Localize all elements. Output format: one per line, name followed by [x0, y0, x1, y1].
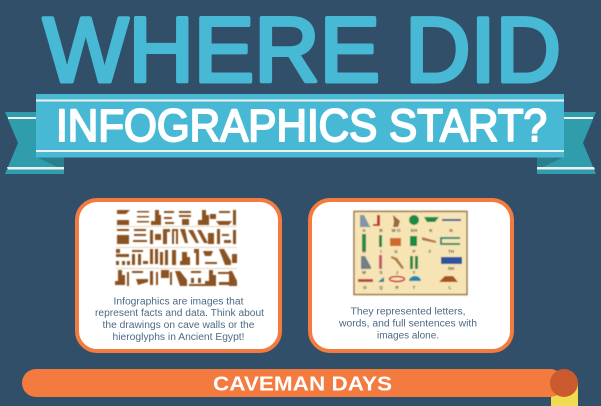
alphabet letters: L — [449, 285, 452, 290]
parchment alphabet illustration — [353, 210, 468, 296]
card text — [338, 306, 477, 342]
card text: represent facts and data. Think about — [95, 308, 264, 319]
card text: hieroglyphs in Ancient Egypt! — [112, 332, 244, 343]
alphabet letters: Y — [412, 270, 416, 275]
panel: alphabet card — [310, 200, 512, 351]
alphabet letters: B — [379, 228, 383, 233]
pencil body — [551, 383, 578, 406]
card text: words, and full sentences with — [338, 318, 477, 330]
alphabet letters: TH — [448, 249, 454, 254]
alphabet letters: J — [396, 270, 399, 275]
alphabet letters — [362, 228, 454, 290]
alphabet letters: R — [395, 285, 399, 290]
timeline heading: CAVEMAN DAYS — [213, 374, 392, 396]
banner heading: INFOGRAPHICS START? — [56, 100, 547, 151]
card text — [95, 296, 264, 343]
title: where did: WHERE DID — [43, 0, 561, 102]
alphabet letters: H — [362, 249, 366, 254]
alphabet letters: N — [449, 228, 453, 233]
alphabet letters: W O — [392, 228, 401, 233]
alphabet letters: SH — [448, 266, 454, 271]
alphabet letters: Q — [379, 285, 383, 290]
alphabet letters: S — [379, 270, 383, 275]
alphabet letters: G — [394, 249, 398, 254]
card text: Infographics are images that — [114, 296, 244, 308]
card text: images alone. — [377, 330, 439, 342]
alphabet letters: I — [380, 249, 382, 254]
alphabet letters: D — [363, 285, 367, 290]
banner — [36, 94, 564, 158]
timeline bar: caveman days — [22, 369, 564, 397]
timeline end cap — [550, 369, 578, 397]
alphabet letters: M — [362, 270, 366, 275]
card text: They represented letters, — [350, 306, 466, 318]
alphabet letters: A — [362, 228, 366, 233]
alphabet letters: K — [429, 228, 433, 233]
alphabet letters: F — [429, 249, 432, 254]
panel: hieroglyphs card — [77, 200, 280, 351]
ribbon: left tail — [5, 112, 64, 174]
ribbon: right tail — [537, 112, 596, 174]
alphabet letters: KH — [411, 228, 417, 233]
hieroglyph illustration — [115, 210, 237, 286]
card text: the drawings on cave walls or the — [102, 320, 255, 331]
alphabet letters: P — [412, 249, 416, 254]
alphabet letters: T — [413, 285, 416, 290]
